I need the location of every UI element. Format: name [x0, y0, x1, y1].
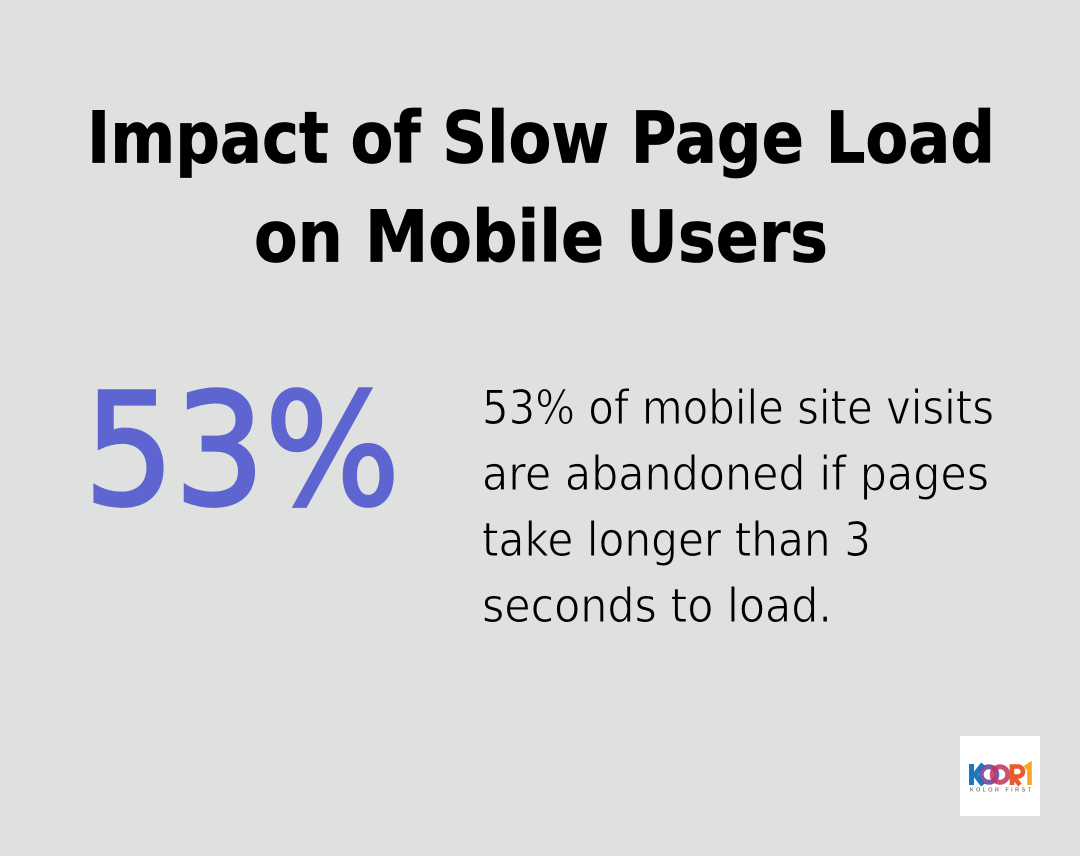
logo: Koor1 Kolor First — [960, 736, 1040, 816]
statistic description — [482, 381, 994, 634]
big statistic: 53%: 53% — [84, 360, 400, 541]
logo tagline: KOLOR FIRST — [970, 788, 1032, 794]
statistic description: seconds to load. — [482, 579, 832, 634]
title: on Mobile Users — [254, 196, 828, 278]
statistic description: are abandoned if pages — [482, 447, 989, 502]
title — [87, 96, 995, 278]
statistic description: take longer than 3 — [482, 513, 871, 568]
statistic description: 53% of mobile site visits — [482, 381, 994, 436]
logo wordmark — [972, 764, 1030, 785]
